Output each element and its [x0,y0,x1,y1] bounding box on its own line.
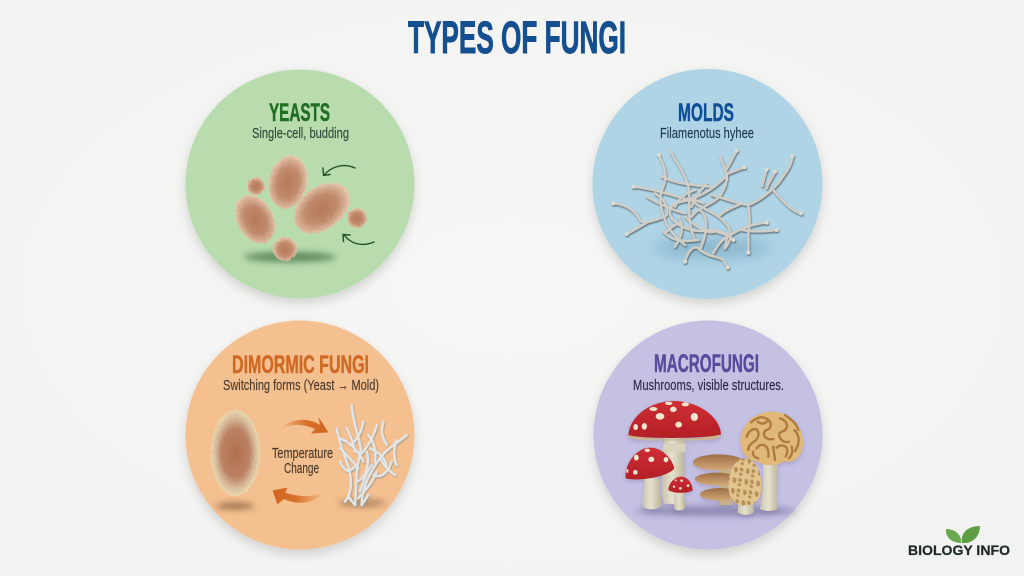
yeast ground shadow [244,252,336,262]
temperature change label [272,445,333,477]
mold ground shadow [654,239,770,257]
mold form hyphae [337,405,407,505]
brain morel mushroom [740,412,803,511]
arrow: yeast to mold [280,417,328,434]
big red mushroom [628,401,721,504]
macrofungi subtitle: Mushrooms, visible structures. [633,377,784,394]
yeasts subtitle: Single-cell, budding [252,125,349,142]
mold hyphae network [611,149,803,269]
panel: macrofungi [594,320,822,550]
shelf fungus [693,454,744,505]
yeasts heading: YEASTS [269,99,330,127]
temperature change label: Temperature [272,445,333,462]
yeast form cell [211,410,260,496]
yeasts circle [186,70,414,298]
icon: leaves [946,526,980,543]
yeast form shadow [216,503,254,509]
dimorphic circle [186,320,414,550]
mold form shadow [338,500,386,506]
logo: biology info [908,526,1010,558]
panel: dimorphic fungi [186,320,414,550]
arrow: budding upper [323,166,355,176]
panel: molds [592,69,822,299]
title: TYPES OF FUNGI [408,12,626,63]
yeast cells [227,152,367,261]
macrofungi heading: MACROFUNGI [654,350,759,378]
molds circle [592,69,822,299]
panel: yeasts [186,70,414,298]
small morel mushroom [728,458,762,515]
dimorphic heading: DIMORMIC FUNGI [232,351,369,379]
dimorphic subtitle: Switching forms (Yeast → Mold) [223,377,379,394]
mushroom group [626,401,803,515]
tiny red mushroom [668,477,693,510]
mushroom ground shadow [636,506,796,516]
macrofungi circle [594,320,822,550]
molds subtitle: Filamenotus hyhee [660,125,754,142]
arrow: budding lower [343,234,374,244]
medium red mushroom [626,448,674,509]
temperature change label: Change [284,460,319,477]
logo text: BIOLOGY INFO [908,542,1010,558]
molds heading: MOLDS [678,99,734,127]
arrow: mold to yeast [273,488,324,504]
